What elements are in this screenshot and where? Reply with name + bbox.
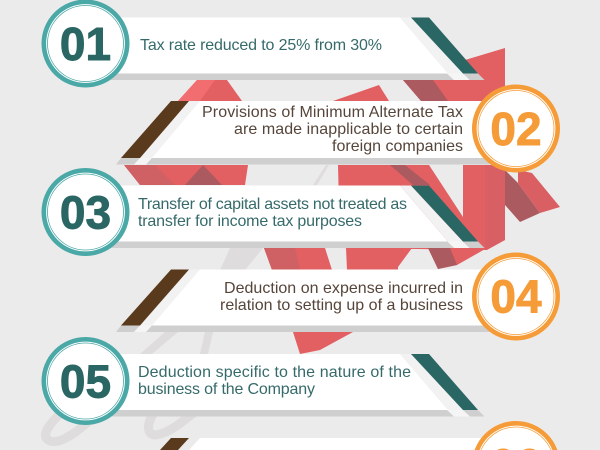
banner 02 <box>116 101 490 164</box>
circle badge 04: 04 <box>490 270 542 322</box>
text 05: business of the Company <box>138 381 315 398</box>
circle badge 05: 05 <box>60 356 111 408</box>
paperclip strokes <box>46 165 329 442</box>
text 02: are made inapplicable to certain <box>234 121 463 138</box>
circle badge 06 <box>474 423 558 450</box>
circle badge 02: 02 <box>490 103 542 155</box>
text 02 <box>202 104 463 155</box>
text 03: transfer for income tax purposes <box>138 213 362 230</box>
circle badge 05 <box>44 339 127 423</box>
banner 01 <box>110 18 484 80</box>
banner 03 <box>110 186 484 248</box>
text 02: foreign companies <box>332 138 463 155</box>
text 04: relation to setting up of a business <box>220 297 463 314</box>
text 03: Transfer of capital assets not treated as <box>138 196 407 213</box>
circle badge 01 <box>44 2 127 85</box>
text 04: Deduction on expense incurred in <box>224 280 463 297</box>
text 04 <box>220 280 463 314</box>
text 05 <box>138 364 411 398</box>
banner 04 <box>116 270 490 332</box>
circle badge 04 <box>474 255 558 338</box>
red arrow pieces <box>124 48 560 354</box>
circle badge 01: 01 <box>60 18 111 70</box>
text 02: Provisions of Minimum Alternate Tax <box>202 104 463 121</box>
text 03 <box>138 196 407 230</box>
text 01: Tax rate reduced to 25% from 30% <box>140 37 382 54</box>
banner 05 <box>110 354 484 416</box>
circle badge 03: 03 <box>60 186 111 238</box>
circle badge 02 <box>474 87 558 170</box>
banner 06 <box>160 438 490 450</box>
background illustration: red arrow and paperclip <box>46 48 560 442</box>
circle badge 03 <box>44 170 127 254</box>
text 05: Deduction specific to the nature of the <box>138 364 411 381</box>
